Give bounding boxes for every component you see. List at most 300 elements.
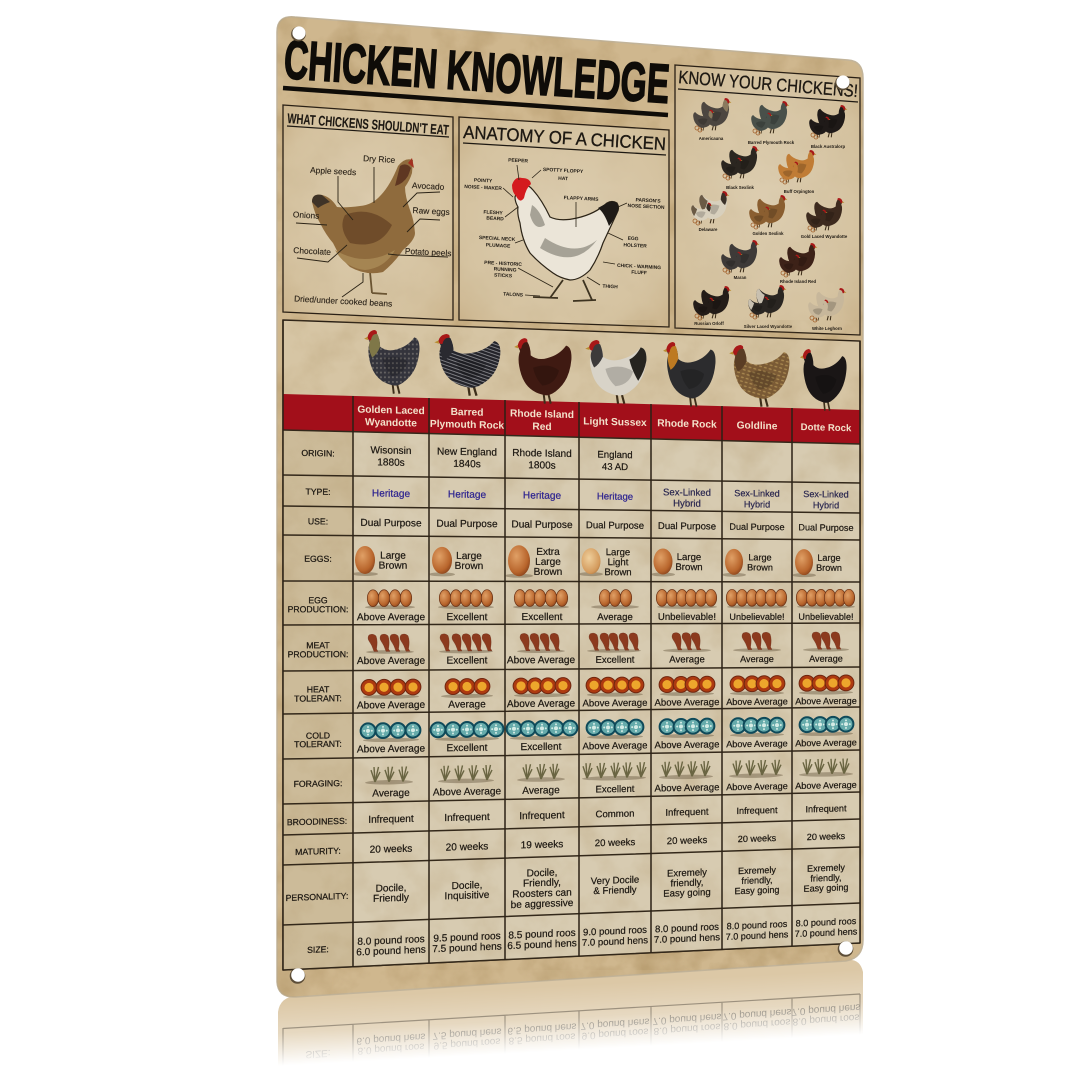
reflection of the sign: 9.0 pound roos	[582, 1026, 648, 1041]
breed name: Golden Laced	[357, 404, 425, 417]
breed name: Dotte Rock	[801, 422, 852, 434]
cell: 20 weeks	[595, 837, 635, 849]
cell: Dual Purpose	[360, 518, 422, 529]
cell: Brown	[816, 563, 842, 573]
cell: 7.5 pound hens	[432, 941, 502, 955]
reflection of the sign: 7.5 pound hens	[433, 1025, 501, 1041]
breed: Black Sexlink: Black Sexlink	[726, 185, 754, 190]
breed: Rhode Island Red	[779, 243, 817, 284]
cell: 3 drumsticks: Average	[809, 654, 843, 664]
breed name: Red	[532, 422, 552, 433]
anatomy labels: PEEPER	[508, 157, 529, 165]
diet labels: Dried/under cooked beans	[294, 293, 392, 309]
row: use	[308, 516, 854, 534]
cell: 6 eggs	[796, 589, 855, 622]
cell: Large	[606, 547, 630, 558]
cell: 8.0 pound roos	[655, 922, 719, 935]
cell: Brown	[379, 561, 407, 572]
cell: Light	[608, 557, 629, 568]
cell: Large	[380, 551, 406, 562]
row: heat tolerant	[294, 675, 857, 712]
cell: 6 eggs	[726, 589, 787, 622]
breed: White Leghorn	[808, 288, 846, 331]
cell: 5 eggs	[513, 590, 569, 623]
breed: Barred Plymouth Rock: Barred Plymouth Rock	[748, 140, 795, 145]
title: CHICKEN KNOWLEDGE	[282, 28, 671, 115]
anatomy labels: SPOTTY FLOPPY	[543, 167, 584, 175]
anatomy labels: TALONS	[503, 291, 524, 299]
diet labels: Apple seeds	[310, 165, 356, 177]
row: meat production	[288, 632, 849, 667]
cell: 4 suns: Above Average	[357, 700, 426, 712]
cell: 6 eggs: Unbelievable!	[729, 612, 785, 622]
diet labels: Onions	[293, 209, 320, 221]
cell: Exremely	[807, 862, 845, 874]
cell: 5 snow discs: Excellent	[521, 742, 562, 753]
anatomy callout lines	[503, 165, 627, 296]
cell: 3 grass tufts: Average	[372, 788, 410, 800]
cell: Infrequent	[737, 805, 778, 816]
cell: 4 drumsticks	[357, 634, 426, 667]
anatomy labels: NOSE SECTION	[627, 203, 665, 211]
cell: 4 grass tufts	[655, 761, 719, 794]
breed: Black Australorp	[809, 105, 847, 149]
row: cold tolerant	[294, 717, 857, 756]
cell: 4 snow discs: Above Average	[357, 744, 426, 755]
cell: 3 suns: Average	[448, 699, 486, 711]
cell: Common	[596, 808, 634, 820]
cell: 1840s	[453, 459, 481, 470]
cell	[651, 548, 703, 577]
row: egg production	[288, 589, 855, 623]
heading: WHAT CHICKENS SHOULDN'T EAT	[287, 110, 450, 138]
panel: know your chickens	[675, 65, 860, 335]
cell: Dual Purpose	[586, 520, 644, 532]
cell: 4 snow discs	[655, 719, 719, 751]
cell: Easy going	[804, 882, 848, 894]
cell: Very Docile	[591, 875, 639, 887]
mounting holes	[290, 26, 853, 984]
hen: Barred Plymouth Rock	[434, 334, 500, 396]
reflection of the sign	[270, 955, 870, 1080]
cell: 4 snow discs: Above Average	[583, 740, 647, 752]
anatomy labels: HAT	[558, 176, 568, 182]
cell: Friendly,	[523, 877, 561, 890]
breed: Silver Laced Wyandotte	[744, 285, 793, 329]
cell: Extra	[536, 547, 560, 558]
cell: Sex-Linked	[663, 487, 711, 499]
breed: Golden Sexlink: Golden Sexlink	[752, 231, 784, 236]
cell: Large	[677, 552, 701, 563]
cell: 5 drumsticks: Excellent	[447, 655, 488, 667]
breed: Buff Orpington	[778, 150, 816, 194]
cell: friendly,	[741, 875, 773, 886]
anatomy labels	[464, 157, 665, 299]
cell: 5 drumsticks	[439, 634, 493, 667]
cell: 5 drumsticks: Excellent	[596, 655, 635, 666]
label: MEAT	[306, 640, 330, 650]
cell: Brown	[534, 567, 562, 578]
label: BROODINESS:	[287, 816, 347, 827]
cell: Exremely	[667, 867, 707, 880]
cell: 9.5 pound roos	[433, 931, 501, 945]
cell: 4 eggs	[357, 590, 426, 623]
reflection of the sign: 8.0 pound roos	[724, 1016, 790, 1032]
label: USE:	[308, 516, 328, 526]
cell: 20 weeks	[446, 841, 488, 854]
label: HEAT	[307, 684, 330, 695]
row: maturity	[295, 831, 846, 858]
anatomy labels: SPECIAL NECK	[479, 235, 516, 243]
table grid lines and red header band	[283, 320, 860, 970]
cell	[792, 549, 842, 577]
label: TOLERANT:	[294, 693, 342, 704]
label: MATURITY:	[295, 846, 341, 857]
cell: Heritage	[523, 490, 561, 502]
anatomy labels: PLUMAGE	[486, 242, 511, 250]
cell	[429, 547, 483, 577]
cell: 20 weeks	[370, 844, 412, 856]
cell: 5 snow discs	[507, 720, 577, 753]
hen: Golden Laced Wyandotte	[364, 330, 419, 394]
cell: 8.0 pound roos	[796, 916, 857, 929]
cell: Dual Purpose	[658, 521, 716, 533]
cell: Infrequent	[806, 803, 847, 814]
cell: Infrequent	[368, 814, 414, 826]
cell: Rhode Island	[512, 448, 572, 460]
anatomy labels: EGG	[627, 236, 639, 242]
reflection of the sign: 8.0 pound roos	[793, 1011, 859, 1027]
cell: 4 suns	[507, 678, 576, 710]
cell: 43 AD	[602, 462, 628, 473]
cell: 1880s	[377, 457, 405, 469]
cell: 4 suns	[726, 676, 788, 707]
cell: Hybrid	[813, 500, 839, 510]
cell: 4 grass tufts: Above Average	[726, 781, 788, 792]
cell: Brown	[604, 567, 632, 578]
cell: 4 grass tufts: Above Average	[795, 780, 857, 791]
row: origin	[301, 444, 633, 473]
cell: 5 grass tufts	[582, 762, 646, 796]
hen portraits row	[364, 330, 847, 411]
cell: 5 eggs	[438, 590, 494, 623]
cell: friendly,	[810, 872, 842, 884]
label: FORAGING:	[294, 778, 342, 789]
anatomy labels: FLAPPY ARMS	[564, 195, 599, 203]
cell: 5 snow discs	[431, 722, 503, 754]
cell: Inquisitive	[445, 890, 490, 902]
reflection of the sign: 9.5 pound roos	[434, 1035, 500, 1051]
panel: what chickens shouldn't eat	[283, 105, 453, 320]
brown hen illustration	[312, 158, 415, 294]
cell: 4 drumsticks: Above Average	[357, 656, 426, 667]
cell: friendly,	[671, 877, 703, 889]
row: size	[307, 916, 858, 961]
cell: Heritage	[597, 491, 633, 503]
label: SIZE:	[307, 944, 329, 955]
cell: 7.0 pound hens	[582, 935, 648, 949]
cell: Easy going	[663, 887, 711, 900]
cell: 4 suns	[655, 676, 719, 709]
cell: Large	[817, 553, 841, 563]
cell: 8.0 pound roos	[727, 919, 788, 931]
breed name: Goldline	[737, 420, 778, 432]
anatomy labels: BEARD	[486, 216, 504, 222]
row: type	[305, 483, 849, 512]
reflection of the sign: SIZE:	[306, 1047, 330, 1060]
breed name: Light Sussex	[583, 416, 647, 429]
breed: Rhode Island Red: Rhode Island Red	[780, 279, 817, 284]
cell: Heritage	[372, 488, 410, 500]
cell: Wisonsin	[371, 445, 411, 457]
cell: 20 weeks	[807, 831, 846, 842]
cell: Easy going	[735, 885, 779, 896]
cell: 6 eggs: Unbelievable!	[658, 612, 716, 623]
cell: 4 grass tufts	[433, 765, 502, 798]
reflection of the sign: 6.0 pound hens	[357, 1030, 425, 1046]
breed: Gold Laced Wyandotte	[801, 198, 848, 239]
breed: Black Australorp: Black Australorp	[811, 144, 845, 149]
cell: 3 grass tufts: Average	[522, 785, 560, 797]
hen: Rhode Island Red	[514, 338, 571, 404]
anatomy labels: THIGH	[602, 284, 618, 290]
diet labels: Raw eggs	[412, 205, 450, 217]
breed: Buff Orpington: Buff Orpington	[784, 189, 815, 194]
anatomy labels: HOLSTER	[623, 242, 647, 250]
cell: 3 eggs: Average	[597, 612, 633, 623]
row: personality	[286, 857, 848, 919]
cell: Roosters can	[512, 887, 572, 901]
cell: 4 snow discs	[357, 723, 426, 755]
cell: 4 grass tufts	[795, 758, 857, 791]
cell: Large	[456, 551, 482, 562]
cell: 4 eggs: Above Average	[357, 612, 426, 623]
cell: New England	[437, 446, 497, 459]
diet labels: Potato peels	[405, 246, 452, 258]
cell: Brown	[675, 562, 703, 573]
anatomy labels: STICKS	[494, 273, 513, 280]
breed: Golden Sexlink	[749, 195, 787, 236]
cell: & Friendly	[593, 885, 637, 897]
cell: 7.0 pound hens	[795, 926, 858, 939]
row: foraging	[294, 758, 857, 801]
cell: Heritage	[448, 489, 486, 501]
cell: 4 suns: Above Average	[726, 696, 788, 707]
label: EGGS:	[304, 554, 332, 564]
cell: 8.0 pound roos	[357, 934, 425, 948]
cell	[352, 546, 407, 576]
metal sign background	[270, 10, 870, 1005]
label: COLD	[306, 730, 330, 741]
cell: 9.0 pound roos	[583, 925, 647, 938]
reflection of the sign: 6.5 pound hens	[508, 1020, 576, 1036]
cell: 5 drumsticks	[587, 633, 641, 666]
cell: Dual Purpose	[798, 522, 854, 533]
cell: Large	[748, 552, 772, 563]
reflection of the sign: 7.0 pound hens	[723, 1006, 791, 1022]
cell: 7.0 pound hens	[654, 932, 720, 946]
cell	[722, 549, 773, 577]
hen: Goldline	[729, 345, 789, 407]
hen: Rhode Rock	[663, 342, 716, 407]
breed: Delaware	[691, 191, 729, 232]
cell: Hybrid	[744, 499, 770, 510]
anatomy labels: FLESHY	[483, 210, 504, 217]
cell: 4 snow discs: Above Average	[726, 738, 788, 749]
breed name: Plymouth Rock	[430, 419, 504, 432]
cell: Exremely	[738, 865, 776, 876]
cell: 3 eggs	[591, 590, 639, 623]
cell: Docile,	[527, 867, 557, 880]
cell: 19 weeks	[521, 839, 563, 851]
cell: 4 suns: Above Average	[795, 696, 857, 706]
cell: Docile,	[452, 880, 482, 892]
cell: 4 grass tufts	[726, 760, 788, 792]
hen: Light Sussex	[585, 340, 646, 404]
header row: breed names	[357, 404, 852, 441]
cell: 3 drumsticks	[663, 632, 711, 666]
cell: 20 weeks	[667, 835, 707, 847]
breed: Black Sexlink	[721, 146, 759, 190]
cell: Sex-Linked	[734, 488, 780, 499]
breed name: Wyandotte	[365, 417, 417, 430]
cell: 4 snow discs: Above Average	[795, 737, 857, 748]
cell: 3 drumsticks: Average	[669, 654, 705, 666]
cell: 4 suns: Above Average	[655, 697, 719, 709]
label: EGG	[308, 595, 328, 605]
anatomy labels: PARSON'S	[635, 197, 661, 205]
label: TOLERANT:	[294, 739, 342, 749]
label: PERSONALITY:	[286, 891, 348, 903]
breed: Maran	[721, 240, 759, 280]
cell: 4 drumsticks	[507, 633, 576, 666]
heading: ANATOMY OF A CHICKEN	[463, 122, 667, 154]
reflection of the sign: 7.0 pound hens	[581, 1015, 649, 1031]
cell: 6.0 pound hens	[356, 945, 426, 958]
cell: 8.5 pound roos	[508, 928, 576, 942]
cell: 4 snow discs: Above Average	[655, 739, 719, 751]
cell: 4 suns	[795, 675, 857, 706]
white hen illustration	[512, 178, 618, 301]
cell: Brown	[747, 562, 773, 573]
row: broodiness	[287, 803, 847, 828]
breed: Americauna: Americauna	[699, 136, 724, 141]
cell: 4 drumsticks: Above Average	[507, 655, 576, 666]
breed: White Leghorn: White Leghorn	[812, 326, 842, 331]
title rule	[283, 88, 668, 115]
anatomy labels: NOISE - MAKER	[464, 184, 502, 192]
breed name: Rhode Island	[510, 408, 574, 421]
breed: Americauna	[693, 98, 731, 141]
heading: KNOW YOUR CHICKENS!	[678, 67, 859, 101]
cell: 3 grass tufts	[365, 766, 413, 800]
cell: 6.5 pound hens	[507, 938, 577, 952]
breed: Russian Orloff: Russian Orloff	[694, 321, 724, 326]
label: PRODUCTION:	[288, 604, 348, 614]
breed: Barred Plymouth Rock	[748, 101, 795, 145]
anatomy labels: PRE - HISTORIC	[484, 260, 522, 268]
cell: 4 suns	[583, 677, 647, 709]
cell: 5 eggs: Excellent	[522, 612, 563, 623]
cell: 6 eggs	[656, 589, 717, 623]
cell: Infrequent	[444, 812, 490, 824]
cell	[505, 545, 562, 578]
label: PRODUCTION:	[288, 649, 348, 659]
cell: 5 eggs: Excellent	[447, 612, 488, 623]
panel: anatomy of a chicken	[459, 117, 669, 327]
cell: 3 drumsticks: Average	[740, 654, 774, 664]
breed: Gold Laced Wyandotte: Gold Laced Wyandotte	[801, 234, 848, 239]
anatomy labels: POINTY	[474, 178, 493, 185]
cell: 7.0 pound hens	[726, 929, 789, 942]
cell: 4 snow discs	[583, 720, 647, 752]
cell: Brown	[455, 561, 483, 572]
breed: Maran: Maran	[734, 275, 747, 280]
cell: Infrequent	[665, 807, 709, 819]
breed name: Barred	[451, 407, 483, 419]
cell: 4 suns: Above Average	[507, 698, 576, 710]
cell: 5 snow discs: Excellent	[447, 743, 488, 754]
cell: Dual Purpose	[436, 519, 498, 530]
cell: 3 grass tufts	[517, 764, 565, 797]
hen: Dotte Rock	[800, 349, 847, 411]
reflection of the sign: 8.5 pound roos	[509, 1030, 575, 1046]
cell: England	[597, 450, 633, 461]
cell: Dual Purpose	[729, 522, 785, 532]
panel: breed comparison table	[283, 320, 860, 970]
diet callout lines	[296, 167, 448, 297]
cell: 4 snow discs	[795, 717, 857, 748]
breed: Delaware: Delaware	[699, 227, 718, 232]
cell: Large	[535, 557, 561, 568]
cell: Friendly	[373, 893, 410, 905]
cell: Infrequent	[519, 810, 565, 822]
reflection of the sign: 7.0 pound hens	[792, 1001, 860, 1017]
cell: 4 snow discs	[726, 718, 788, 749]
cell: 20 weeks	[738, 833, 777, 844]
cell: 3 suns	[441, 678, 493, 711]
cell: Hybrid	[673, 498, 701, 510]
reflection of the sign: 7.0 pound hens	[653, 1011, 721, 1026]
cell: 4 grass tufts: Above Average	[433, 786, 502, 798]
breed: Silver Laced Wyandotte: Silver Laced Wyandotte	[744, 324, 793, 329]
cell	[579, 547, 632, 578]
cell: 5 grass tufts: Excellent	[596, 784, 635, 796]
label: ORIGIN:	[301, 448, 335, 459]
breed: Russian Orloff	[693, 286, 731, 326]
reflection of the sign: 8.0 pound roos	[358, 1041, 424, 1056]
cell: be aggressive	[511, 898, 574, 911]
diet labels: Chocolate	[293, 245, 332, 257]
anatomy labels: FLUFF	[631, 270, 647, 276]
diet labels	[293, 153, 452, 309]
row: eggs	[304, 544, 842, 579]
cell: Dual Purpose	[511, 519, 573, 531]
diet labels: Avocado	[412, 180, 445, 192]
cell: Sex-Linked	[803, 489, 849, 500]
cell: 4 suns: Above Average	[583, 698, 647, 709]
label: TYPE:	[305, 487, 331, 497]
diet labels: Dry Rice	[363, 153, 396, 165]
cell: 6 eggs: Unbelievable!	[798, 612, 854, 622]
cell: 3 drumsticks	[803, 632, 849, 664]
anatomy labels: CHICK - WARMING	[617, 263, 661, 271]
cell: 1800s	[528, 460, 556, 472]
breed name: Rhode Rock	[657, 418, 717, 431]
cell: Docile,	[376, 883, 406, 895]
cell: 3 drumsticks	[733, 632, 781, 664]
anatomy labels: RUNNING	[493, 266, 517, 274]
